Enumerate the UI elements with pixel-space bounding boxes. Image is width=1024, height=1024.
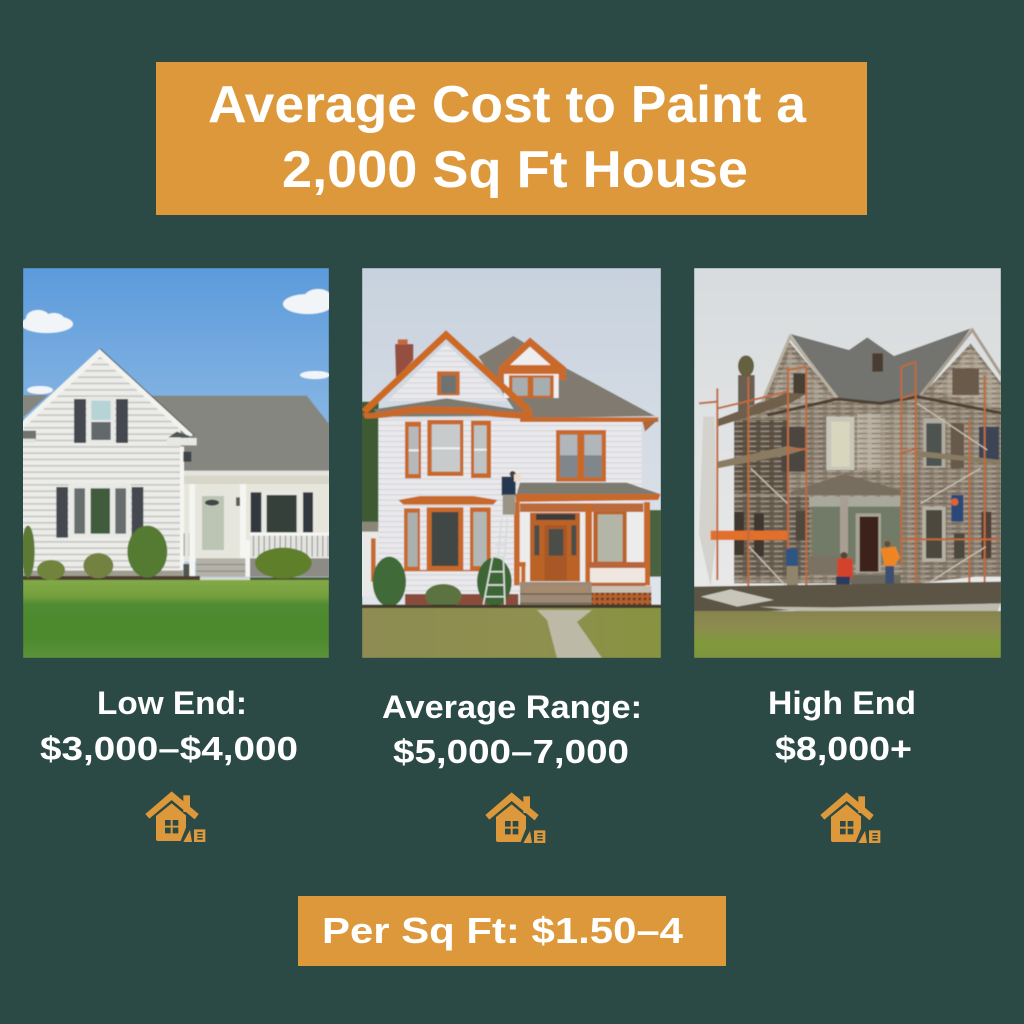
title banner: 2,000 Sq Ft House	[282, 141, 748, 199]
low end price label: $3,000–$4,000	[40, 730, 298, 767]
icon: house with paint bucket, average range	[485, 792, 545, 843]
panel: average range house photo	[360, 268, 665, 658]
high end price label: High End	[768, 685, 916, 721]
high end price label	[768, 685, 916, 767]
low end price label: Low End:	[97, 685, 247, 721]
average range price label	[382, 689, 642, 770]
title banner: Average Cost to Paint a	[208, 76, 807, 134]
per square foot banner	[298, 896, 726, 966]
panel: high end house photo	[694, 268, 1004, 658]
panel: low end house photo	[20, 268, 333, 658]
icon: house with paint bucket, low end	[145, 791, 205, 842]
icon: house with paint bucket, high end	[820, 792, 880, 843]
average range price label: Average Range:	[382, 689, 642, 725]
per square foot banner: Per Sq Ft: $1.50–4	[322, 910, 683, 951]
low end price label	[40, 685, 298, 767]
title banner	[156, 62, 867, 215]
high end price label: $8,000+	[775, 730, 912, 767]
average range price label: $5,000–7,000	[393, 733, 629, 770]
